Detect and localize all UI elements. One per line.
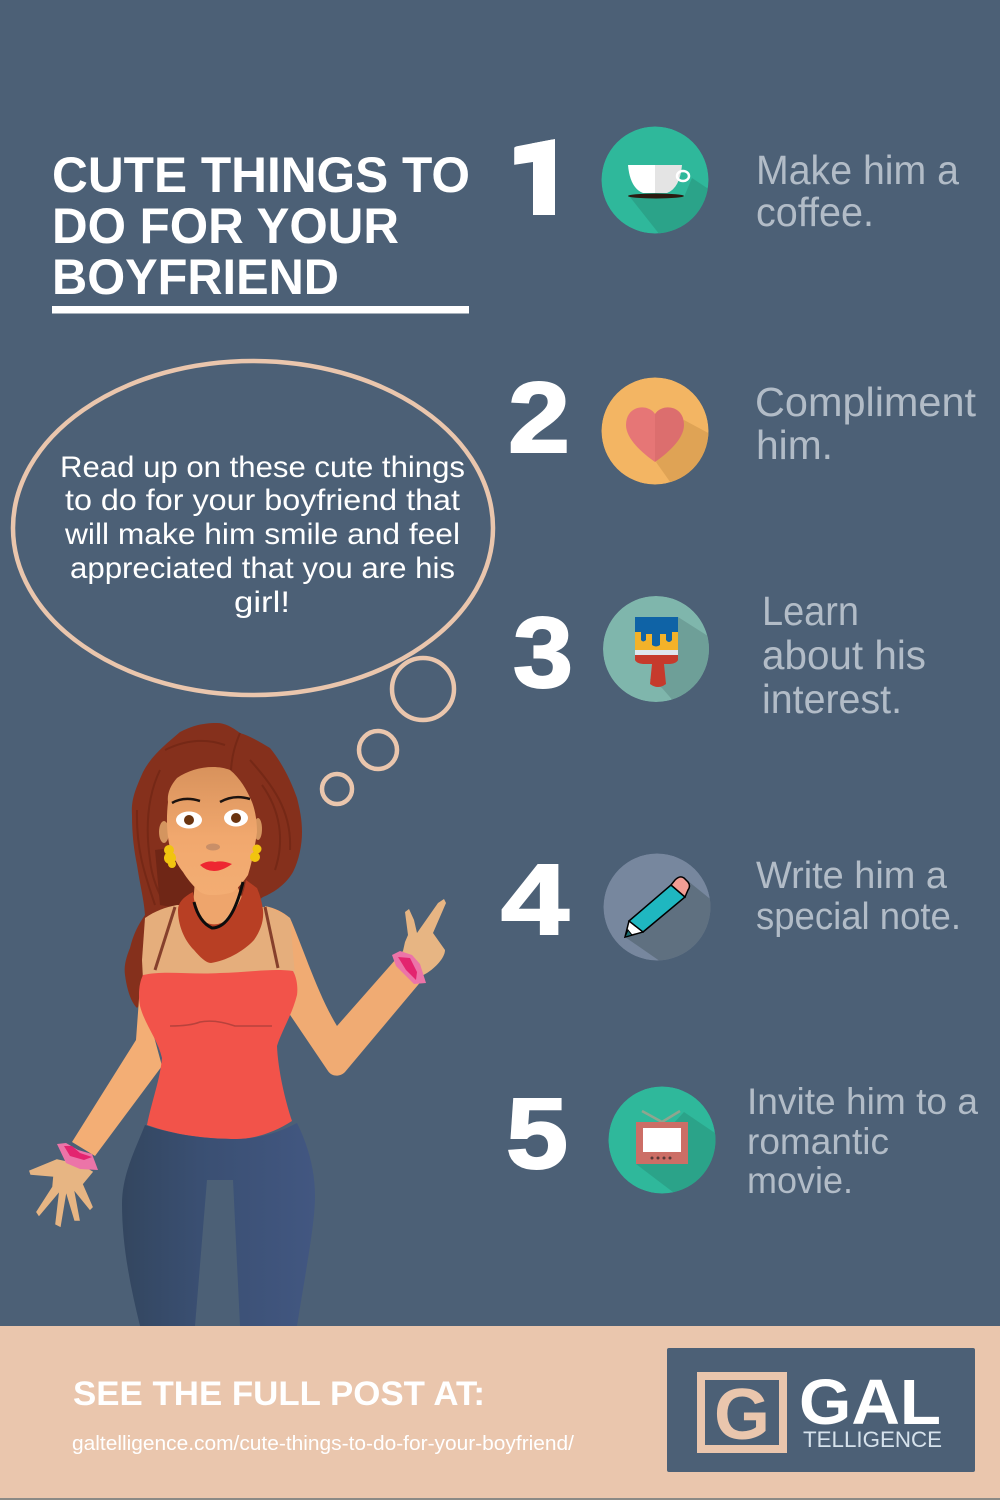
- intro text: Read up on these cute things: [60, 451, 465, 484]
- hair silhouette: [125, 723, 302, 1008]
- necklace: [194, 882, 243, 928]
- step number 1: 1: [513, 117, 572, 235]
- left hand: [30, 1160, 92, 1226]
- right hand pointing: [403, 899, 446, 978]
- ears: [159, 818, 262, 843]
- intro text: will make him smile and feel: [64, 518, 460, 551]
- step 1 text: coffee.: [756, 189, 874, 235]
- logo: TELLIGENCE: [803, 1427, 942, 1452]
- step number 5: 5: [506, 1078, 568, 1190]
- logo: [667, 1348, 975, 1472]
- step 3 text: interest.: [762, 676, 902, 722]
- left scrunchie: [57, 1143, 98, 1170]
- hair shadows and strands: [137, 733, 290, 905]
- step 2 text: him.: [756, 422, 833, 468]
- face: [167, 767, 257, 895]
- step 2 text: Compliment: [755, 379, 977, 425]
- step 1 text: Make him a: [756, 147, 959, 193]
- nose: [206, 844, 220, 850]
- step number 4: 4: [501, 844, 569, 956]
- thought bubble: [13, 361, 493, 804]
- jeans: [122, 1123, 315, 1326]
- title: BOYFRIEND: [52, 249, 339, 305]
- intro text: girl!: [234, 586, 290, 619]
- red top: [139, 970, 297, 1139]
- step 2 text: [755, 379, 977, 468]
- neck: [193, 880, 243, 932]
- intro text: to do for your boyfriend that: [65, 484, 461, 517]
- step 5 text: movie.: [747, 1160, 853, 1201]
- right arm: [265, 906, 423, 1076]
- title: DO FOR YOUR: [52, 198, 399, 254]
- scarf: [178, 880, 263, 963]
- icon: coffee cup: [602, 126, 708, 234]
- logo: G: [714, 1375, 770, 1455]
- left arm: [72, 985, 162, 1156]
- step 5 text: romantic: [747, 1121, 889, 1162]
- title: [52, 147, 470, 314]
- step 5 text: [747, 1081, 978, 1201]
- step 3 text: [762, 588, 926, 722]
- intro text: appreciated that you are his: [70, 552, 455, 585]
- step 4 text: [756, 855, 961, 938]
- footer heading: SEE THE FULL POST AT:: [73, 1375, 485, 1413]
- step number 2: 2: [508, 362, 570, 474]
- title: CUTE THINGS TO: [52, 147, 470, 203]
- icon: heart: [602, 378, 708, 484]
- icon: pencil: [604, 854, 710, 960]
- step 4 text: special note.: [756, 896, 961, 938]
- chest: [142, 905, 295, 980]
- character illustration: [30, 723, 446, 1326]
- step number 3: 3: [513, 597, 573, 709]
- icon: paint brush: [603, 596, 709, 702]
- step 3 text: Learn: [762, 588, 859, 634]
- top crease: [170, 1021, 272, 1026]
- logo: GAL: [799, 1366, 941, 1438]
- eyes: [172, 797, 250, 828]
- icon: television: [608, 1086, 716, 1194]
- step 3 text: about his: [762, 632, 926, 678]
- right scrunchie: [392, 951, 426, 984]
- footer panel: [0, 1326, 1000, 1500]
- lips: [200, 861, 232, 871]
- earrings: [164, 844, 262, 868]
- step 1 text: [756, 147, 959, 235]
- step 4 text: Write him a: [756, 855, 948, 897]
- straps: [155, 907, 278, 970]
- hair shadow beside neck: [155, 848, 200, 908]
- intro text: [60, 451, 465, 619]
- step 5 text: Invite him to a: [747, 1081, 978, 1122]
- footer url: galtelligence.com/cute-things-to-do-for-your-boyfriend/: [72, 1433, 574, 1455]
